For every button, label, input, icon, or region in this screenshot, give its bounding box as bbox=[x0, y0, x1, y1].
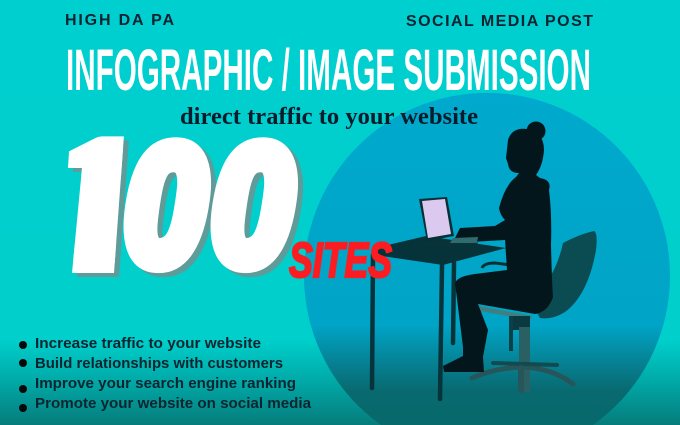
100 shadow: 0 bbox=[217, 116, 297, 303]
subtitle: direct traffic to your website bbox=[180, 104, 478, 130]
blue circle bbox=[304, 93, 670, 425]
bullet 4: Promote your website on social media bbox=[35, 396, 312, 412]
100 headline bbox=[68, 136, 304, 278]
benefits list bbox=[19, 336, 312, 412]
100 number: 0 bbox=[125, 112, 205, 299]
illustration: person at desk bbox=[372, 122, 597, 399]
SITES label: SITES bbox=[289, 234, 392, 288]
100 shadow: 0 bbox=[130, 116, 210, 303]
100 number: 0 bbox=[212, 112, 292, 299]
bullet 2: Build relationships with customers bbox=[35, 356, 283, 372]
top left label: HIGH DA PA bbox=[65, 12, 174, 29]
desk top bbox=[375, 236, 506, 265]
100 number bbox=[68, 136, 298, 274]
bullet 1: Increase traffic to your website bbox=[35, 336, 261, 352]
desk legs bbox=[372, 255, 454, 399]
chair bbox=[472, 231, 597, 392]
100 shadow bbox=[73, 140, 304, 278]
100 shadow: 1 bbox=[44, 116, 152, 303]
top right label: SOCIAL MEDIA POST bbox=[406, 13, 593, 30]
laptop bbox=[419, 197, 478, 246]
100 number: 1 bbox=[39, 112, 147, 299]
bullet 3: Improve your search engine ranking bbox=[35, 376, 296, 392]
person bbox=[443, 122, 553, 372]
